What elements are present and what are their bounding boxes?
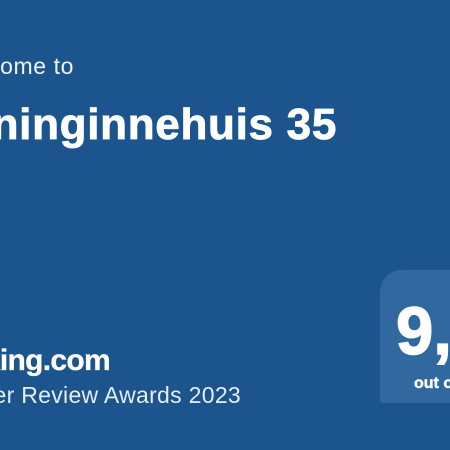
- score card: [380, 270, 450, 403]
